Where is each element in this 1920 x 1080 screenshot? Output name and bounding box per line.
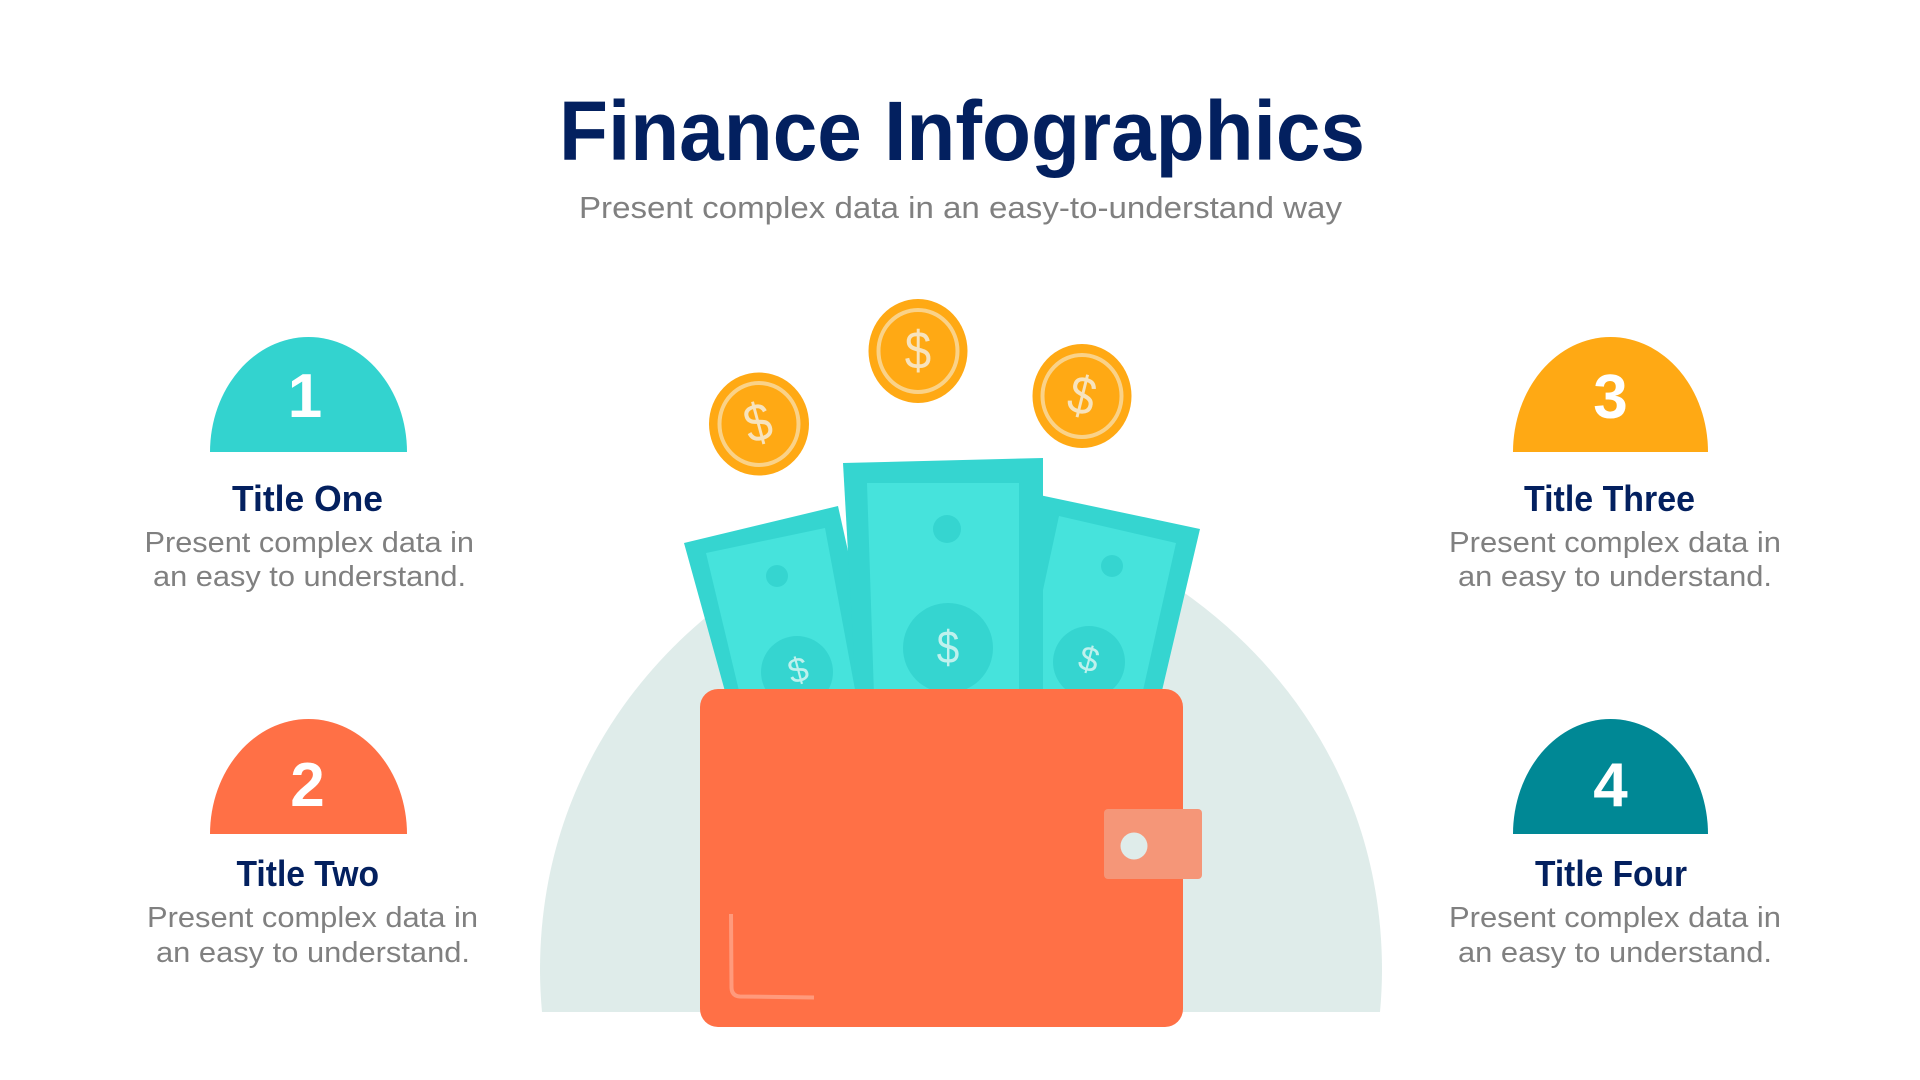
panel: title three <box>1449 337 1781 593</box>
panel: title one <box>144 337 474 593</box>
text: description two <box>147 902 478 969</box>
wallet illustration <box>540 299 1382 1027</box>
badge: 4: 4 <box>1593 751 1628 820</box>
badge: 1 <box>210 337 407 452</box>
badge: 3: 3 <box>1593 363 1628 432</box>
badge: 4 <box>1513 719 1708 834</box>
banknote: center <box>843 458 1043 695</box>
subtitle: Present complex data in an easy-to-understand way <box>579 190 1343 225</box>
banknote: center: $ <box>937 623 959 674</box>
text: description two: an easy to understand. <box>156 937 470 969</box>
text: description one: an easy to understand. <box>153 561 466 593</box>
badge: 1: 1 <box>288 362 322 431</box>
badge: 2 <box>210 719 407 834</box>
heading: title three: Title Three <box>1524 478 1695 519</box>
text: description three: an easy to understand. <box>1458 561 1772 593</box>
heading: title two: Title Two <box>236 853 379 894</box>
text: description three: Present complex data in <box>1449 527 1781 559</box>
text: description four: an easy to understand. <box>1458 937 1772 969</box>
coin: left <box>709 372 809 476</box>
badge: 2: 2 <box>290 751 325 820</box>
wallet clasp <box>1104 809 1202 879</box>
coin: right <box>1032 344 1132 448</box>
title: Finance Infographics <box>559 84 1365 178</box>
text: description two: Present complex data in <box>147 902 478 934</box>
background semicircle <box>540 555 1382 1012</box>
banknote: right <box>1030 493 1200 698</box>
wallet body <box>700 689 1183 1027</box>
wallet stitch line <box>731 914 814 998</box>
banknote: left: $ <box>784 649 813 692</box>
coin: center <box>868 299 968 403</box>
coin: right: $ <box>1062 363 1102 428</box>
text: description four: Present complex data in <box>1449 902 1781 934</box>
coin: center: $ <box>905 320 931 381</box>
panel: title four <box>1449 719 1781 969</box>
badge: 3 <box>1513 337 1708 452</box>
heading: title one: Title One <box>232 478 383 519</box>
panel: title two <box>147 719 478 969</box>
text: description four <box>1449 902 1781 969</box>
heading: title four: Title Four <box>1535 853 1687 894</box>
text: description one: Present complex data in <box>144 527 474 559</box>
banknote: right: $ <box>1074 638 1103 681</box>
coin: left: $ <box>737 390 778 455</box>
text: description one <box>144 527 474 593</box>
banknote: left <box>684 506 880 708</box>
text: description three <box>1449 527 1781 593</box>
